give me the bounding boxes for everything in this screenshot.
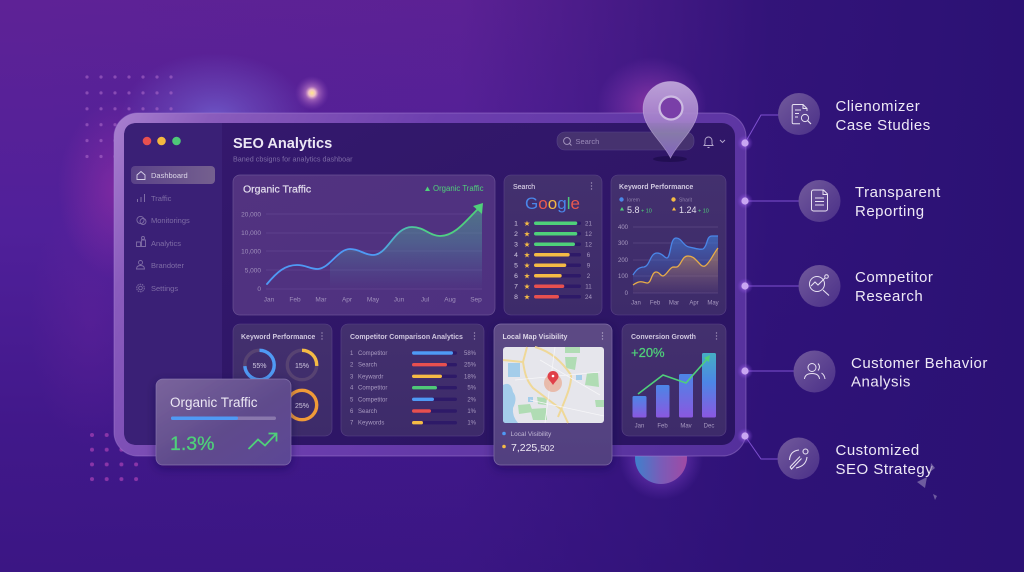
y axis labels bbox=[618, 225, 629, 297]
orange area bbox=[633, 248, 718, 293]
label: Customer Behavior bbox=[851, 355, 988, 372]
menu dots bbox=[591, 182, 592, 190]
map bbox=[503, 347, 604, 423]
values: 1% bbox=[467, 409, 477, 415]
row labels: 7 bbox=[350, 421, 354, 427]
x axis labels bbox=[631, 300, 719, 306]
sidebar bbox=[131, 137, 215, 293]
row labels: Search bbox=[358, 409, 377, 415]
google logo: Google bbox=[525, 194, 580, 213]
x axis labels: Mar bbox=[669, 300, 679, 306]
item: Transparent Reporting bbox=[798, 180, 941, 222]
x axis labels: Jul bbox=[421, 296, 430, 304]
ranks: 8 bbox=[514, 294, 518, 301]
values: 5% bbox=[467, 386, 477, 392]
values: 24 bbox=[585, 294, 592, 301]
values: 2% bbox=[467, 397, 477, 403]
menu dots bbox=[321, 332, 323, 340]
axis labels: Mav bbox=[680, 424, 692, 430]
x axis labels: Jan bbox=[264, 296, 275, 304]
x axis labels: Sep bbox=[470, 296, 482, 304]
label: Case Studies bbox=[836, 117, 931, 134]
x axis labels: Apr bbox=[342, 296, 353, 304]
pin glow bbox=[597, 57, 707, 153]
values: 9 bbox=[587, 262, 591, 270]
y axis labels: 10,000 bbox=[241, 230, 261, 237]
traffic line bbox=[267, 208, 479, 284]
menu dots bbox=[474, 332, 475, 340]
stars: ★ bbox=[524, 230, 531, 238]
row labels bbox=[350, 351, 387, 427]
y axis labels: 200 bbox=[618, 258, 629, 264]
row labels: 1 bbox=[350, 351, 354, 357]
x axis labels: Feb bbox=[650, 300, 661, 306]
visibility count: 7,225,502 bbox=[511, 442, 555, 454]
label: Reporting bbox=[855, 203, 925, 220]
panel: keyword performance chart bbox=[611, 175, 726, 315]
menu dots bbox=[602, 332, 603, 340]
row labels: 2 bbox=[350, 363, 354, 369]
nav: Monitorings: Monitorings bbox=[151, 216, 190, 225]
x axis labels: Mar bbox=[315, 296, 327, 304]
row labels: Keywords bbox=[358, 421, 384, 427]
nav: Brandoter: Brandoter bbox=[151, 261, 184, 270]
item: Competitor Research bbox=[798, 265, 933, 307]
growth line bbox=[638, 358, 708, 394]
values: 21 bbox=[585, 220, 592, 228]
stat: blue series: Iorem bbox=[627, 198, 640, 204]
ranks: 4 bbox=[514, 252, 518, 259]
ranks: 2 bbox=[514, 231, 518, 238]
ranks: 7 bbox=[514, 284, 518, 291]
dashboard window bbox=[124, 123, 735, 445]
values: 25% bbox=[464, 363, 477, 369]
row labels: 6 bbox=[350, 409, 354, 415]
panel: organic traffic chart bbox=[233, 175, 495, 315]
tracks bbox=[412, 351, 457, 424]
connector: competitor bbox=[737, 278, 799, 294]
ranks: 6 bbox=[514, 273, 518, 280]
bars bbox=[412, 351, 453, 424]
values bbox=[585, 220, 592, 301]
stars: ★ bbox=[524, 250, 531, 260]
icon: chart magnifier bbox=[798, 265, 840, 307]
heading: Search bbox=[513, 184, 535, 191]
row labels: Competitor bbox=[358, 351, 387, 357]
stars: ★ bbox=[524, 261, 531, 270]
stat: blue series bbox=[619, 197, 652, 215]
values: 2 bbox=[587, 273, 591, 280]
orange line bbox=[633, 248, 718, 285]
panel: search ranking bbox=[504, 175, 602, 315]
y axis labels: 20,000 bbox=[241, 212, 261, 218]
nav: Settings: Settings bbox=[151, 284, 178, 293]
icon: strategy bbox=[778, 438, 820, 480]
values: 11 bbox=[585, 284, 592, 290]
y axis labels: 300 bbox=[618, 241, 629, 247]
ranks bbox=[514, 221, 518, 301]
y axis labels: 0 bbox=[257, 286, 261, 293]
panel: keyword performance donuts bbox=[233, 324, 332, 436]
heading: Keyword Performance bbox=[241, 334, 315, 341]
label: Transparent bbox=[855, 184, 941, 201]
y axis labels: 10,000 bbox=[241, 248, 261, 256]
ranks: 1 bbox=[514, 221, 518, 228]
values: 1% bbox=[467, 421, 477, 427]
axis labels: Dec bbox=[704, 424, 714, 430]
nav: Analytics bbox=[136, 236, 181, 248]
heading: Keyword Performance bbox=[619, 184, 693, 191]
row labels: Keywardr bbox=[358, 374, 383, 380]
y axis labels bbox=[241, 212, 261, 293]
nav: Dashboard active bbox=[131, 166, 215, 184]
nav: Settings bbox=[137, 284, 178, 293]
donut 15%: 15% bbox=[295, 363, 309, 370]
donut 55%: 55% bbox=[252, 363, 267, 370]
stars: ★ bbox=[524, 292, 531, 302]
blue line bbox=[633, 236, 718, 275]
ranks: 5 bbox=[514, 263, 518, 270]
label: SEO Strategy bbox=[836, 461, 933, 478]
item: Customized SEO Strategy bbox=[778, 438, 933, 480]
x axis labels bbox=[264, 296, 482, 304]
trend arrow bbox=[248, 434, 276, 449]
stars bbox=[524, 219, 531, 302]
x axis labels: May bbox=[707, 300, 719, 306]
label: Research bbox=[855, 288, 923, 305]
row labels: 5 bbox=[350, 397, 354, 403]
connector: behavior bbox=[737, 363, 795, 379]
item: Customer Behavior Analysis bbox=[794, 350, 988, 392]
bell icon and chevron bbox=[704, 137, 725, 148]
y axis labels: 400 bbox=[618, 225, 629, 231]
values: 58% bbox=[464, 351, 477, 357]
legend: Organic Traffic bbox=[433, 184, 484, 193]
panel: local map visibility bbox=[494, 324, 612, 465]
menu dots bbox=[716, 332, 717, 340]
nav: Brandoter bbox=[136, 260, 184, 270]
decorative orb bbox=[619, 416, 703, 500]
axis labels bbox=[635, 424, 714, 430]
dot pattern: top left bbox=[85, 75, 175, 159]
axis labels: Feb bbox=[657, 424, 668, 430]
stat: orange series: Sharit bbox=[679, 198, 693, 204]
connector: case studies bbox=[737, 115, 779, 151]
arrow head bbox=[473, 203, 483, 214]
panel: competitor comparison bbox=[341, 324, 484, 436]
row labels: Search bbox=[358, 363, 377, 369]
donut 25%: 25% bbox=[295, 403, 309, 410]
label: Analysis bbox=[851, 374, 911, 390]
row labels: Competitor bbox=[358, 397, 387, 403]
heading: Organic Traffic bbox=[243, 184, 311, 196]
nav: Traffic: Traffic bbox=[151, 194, 172, 203]
connector: strategy bbox=[737, 428, 778, 459]
stat: orange series: 1.24 bbox=[679, 205, 697, 215]
stars: ★ bbox=[524, 219, 531, 228]
nav: Analytics: Analytics bbox=[151, 239, 181, 248]
connector: reporting bbox=[737, 193, 799, 209]
x axis labels: Jan bbox=[631, 300, 641, 306]
row labels: 3 bbox=[350, 374, 354, 380]
progress bar bbox=[171, 416, 276, 420]
icon: document search bbox=[778, 93, 820, 135]
dashboard glass frame bbox=[114, 113, 746, 456]
search bar: Search bbox=[576, 137, 599, 146]
growth value: +20% bbox=[631, 345, 665, 360]
dot pattern: bottom left bbox=[89, 432, 139, 482]
x axis labels: Jun bbox=[394, 296, 405, 304]
stat: orange series: + 10 bbox=[698, 208, 709, 214]
arrow tip bbox=[704, 355, 710, 362]
values: 12 bbox=[585, 231, 592, 238]
ranking tracks bbox=[534, 222, 581, 298]
local visibility label: Local Visibility bbox=[510, 431, 552, 438]
values bbox=[464, 351, 477, 427]
y axis labels: 100 bbox=[618, 274, 629, 280]
subtitle: Baned cbsigns for analytics dashboar bbox=[233, 154, 353, 164]
panel: conversion growth bbox=[622, 324, 726, 436]
x axis labels: Feb bbox=[289, 296, 301, 304]
values: 12 bbox=[585, 242, 592, 248]
light flare bbox=[295, 76, 329, 110]
heading: Local Map Visibility bbox=[502, 334, 567, 341]
icon: people bbox=[794, 350, 836, 392]
decorative cursor shards bbox=[917, 463, 937, 500]
heading: Organic Traffic bbox=[170, 395, 258, 410]
row labels: 4 bbox=[350, 386, 354, 392]
stat: blue series: 5.8 bbox=[627, 205, 640, 215]
label: Competitor bbox=[855, 269, 933, 286]
icon: document bbox=[798, 180, 840, 222]
panel: organic traffic glass card bbox=[156, 379, 291, 465]
ranks: 3 bbox=[514, 242, 518, 249]
axis labels: Jan bbox=[635, 424, 644, 430]
row labels: Competitor bbox=[358, 386, 387, 392]
blue area bbox=[633, 236, 718, 293]
y axis labels: 5,000 bbox=[245, 268, 261, 274]
item: Clienomizer Case Studies bbox=[778, 93, 931, 135]
stars: ★ bbox=[524, 282, 531, 291]
search bar bbox=[557, 132, 694, 150]
heading: Competitor Comparison Analytics bbox=[350, 334, 463, 341]
values: 6 bbox=[587, 252, 591, 259]
stat: orange series bbox=[671, 197, 709, 215]
label: Customized bbox=[836, 442, 920, 459]
title: SEO Analytics bbox=[233, 136, 332, 152]
label: Clienomizer bbox=[836, 98, 920, 115]
nav: Dashboard active: Dashboard bbox=[151, 171, 188, 180]
window controls bbox=[143, 137, 181, 145]
stars: ★ bbox=[524, 272, 531, 280]
heading: Conversion Growth bbox=[631, 334, 696, 341]
stat: blue series: + 10 bbox=[641, 208, 652, 214]
value: 1.3% bbox=[170, 433, 214, 455]
nav: Traffic bbox=[138, 194, 172, 203]
location pin bbox=[643, 81, 698, 162]
x axis labels: Apr bbox=[689, 300, 699, 306]
area under line bbox=[330, 205, 482, 289]
x axis labels: Aug bbox=[444, 296, 456, 304]
ranking bars bbox=[534, 222, 577, 298]
values: 18% bbox=[464, 374, 477, 380]
bars bbox=[632, 353, 716, 418]
y axis labels: 0 bbox=[625, 291, 629, 297]
x axis labels: May bbox=[367, 296, 380, 304]
stars: ★ bbox=[524, 240, 531, 249]
